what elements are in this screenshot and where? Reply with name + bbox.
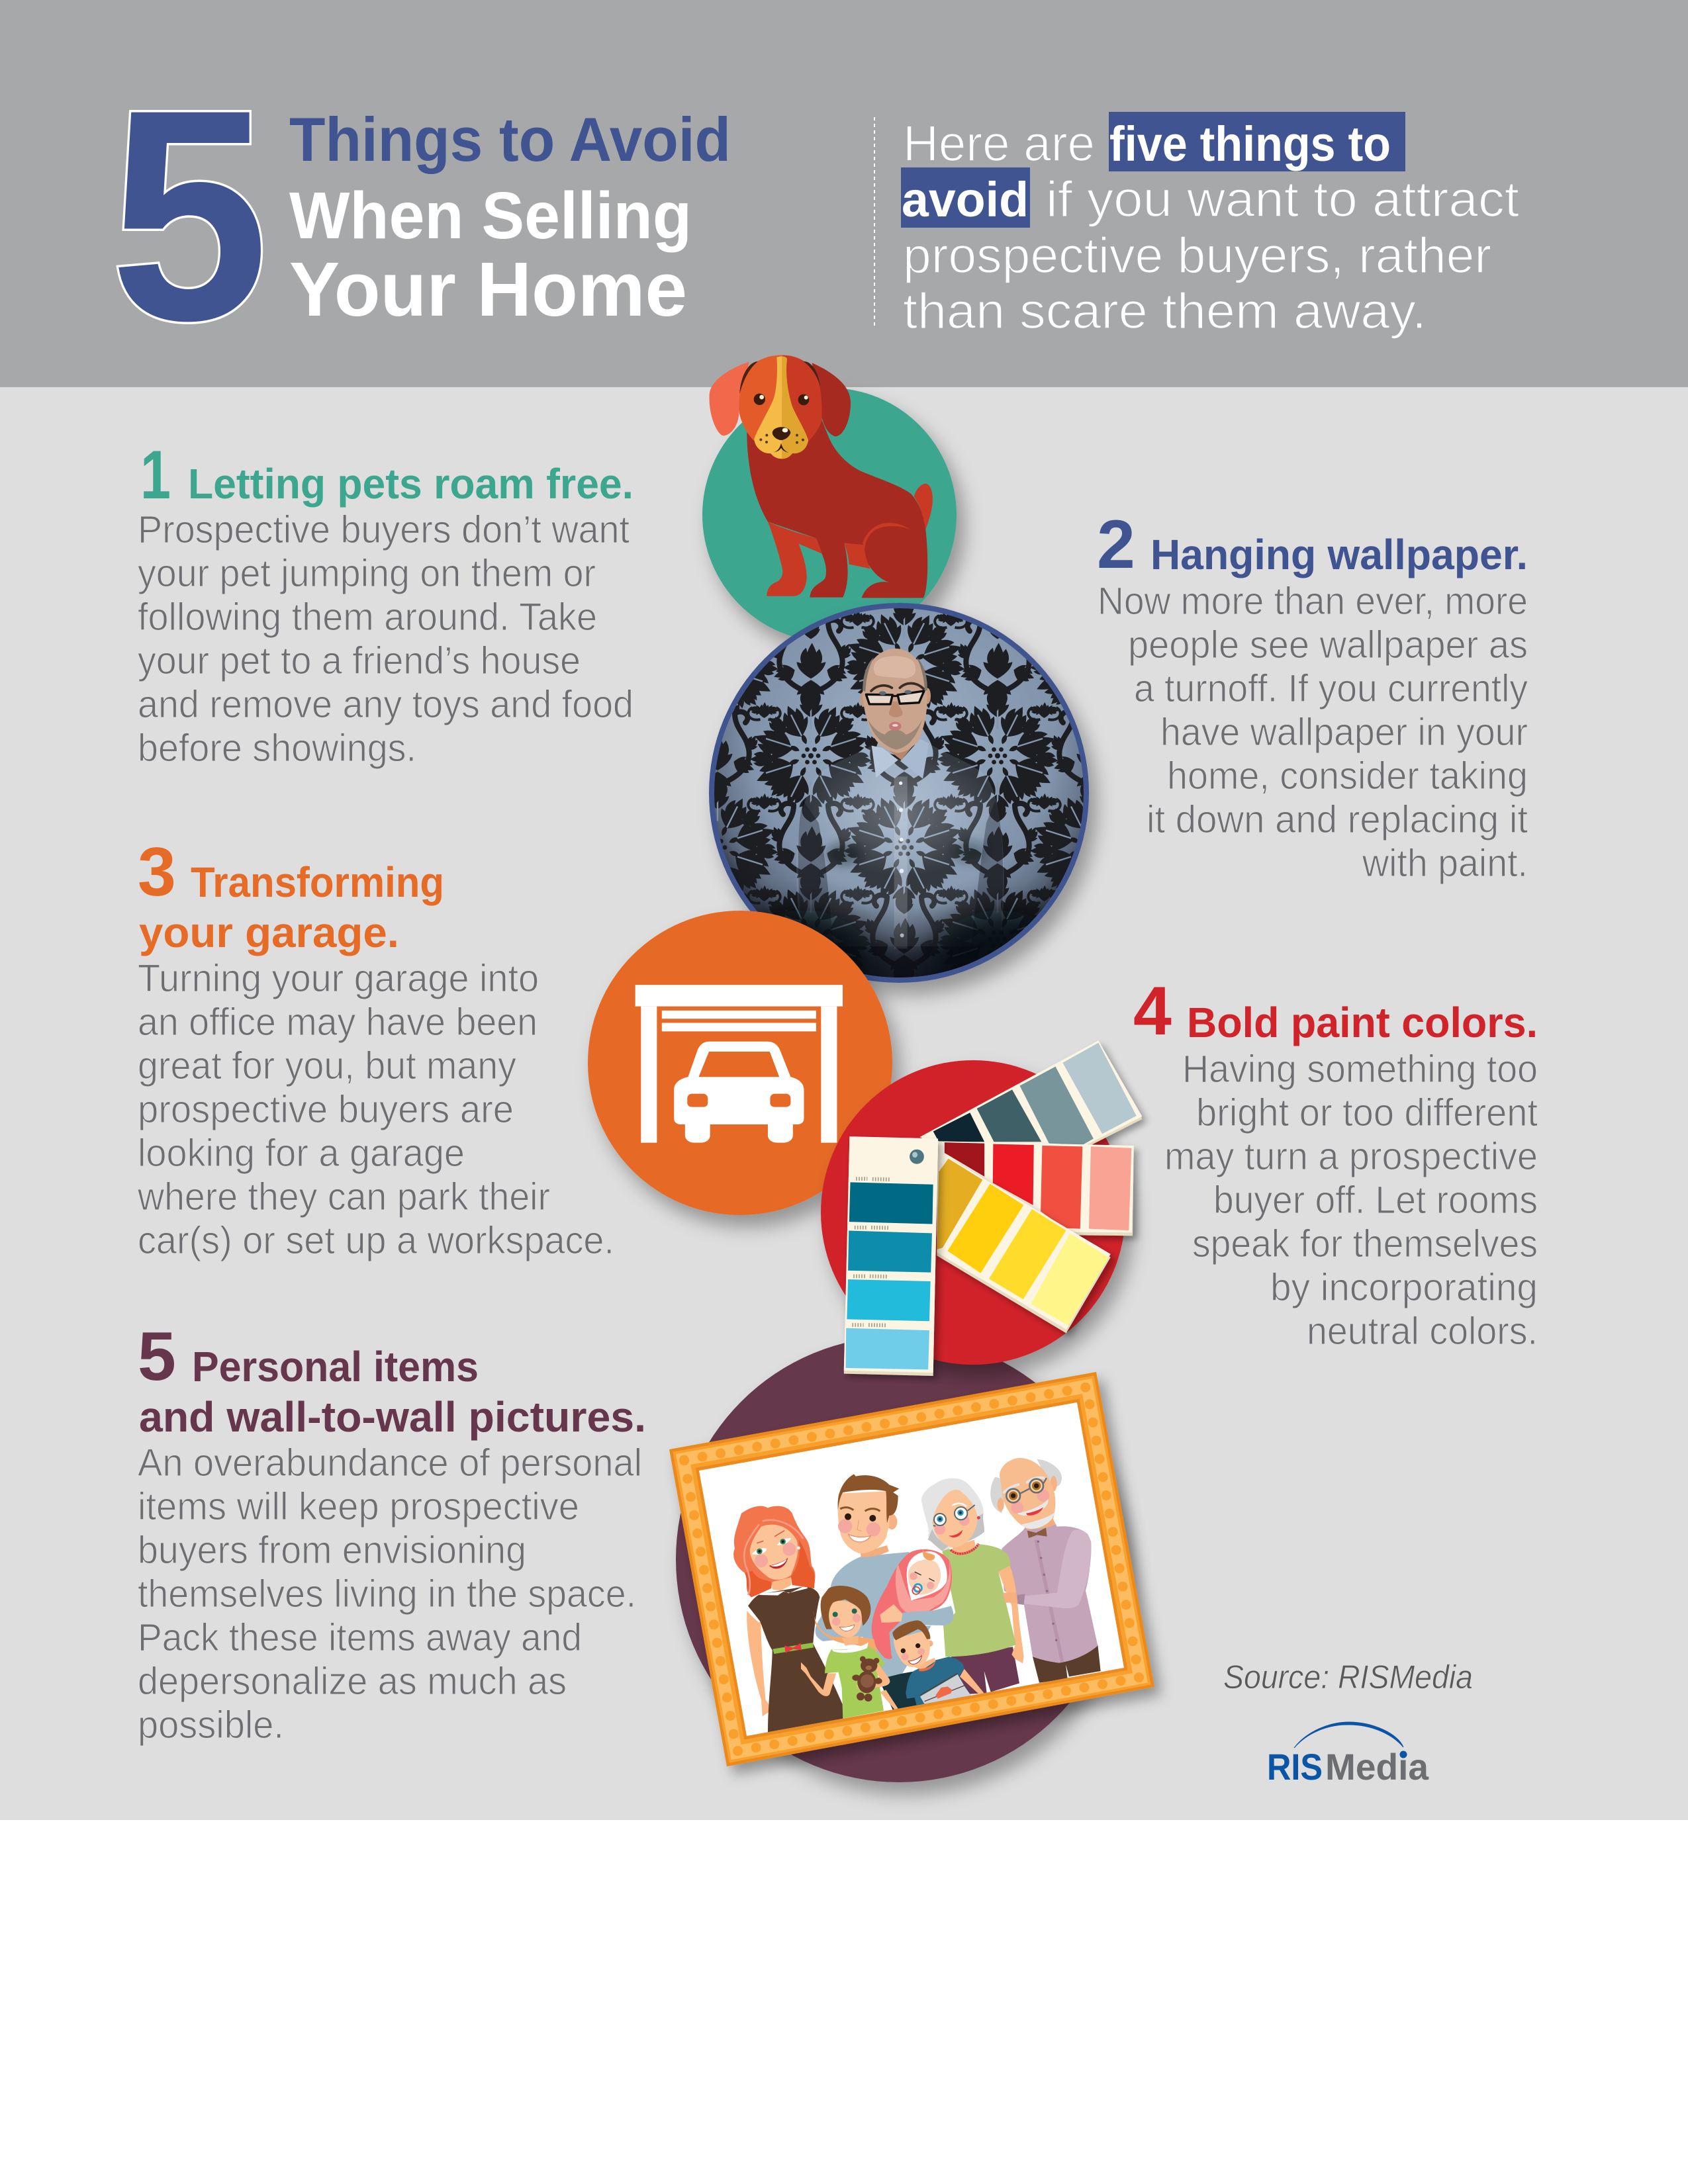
boy in teal shirt xyxy=(880,1620,984,1709)
item 3 text xyxy=(137,834,614,1262)
grandparents xyxy=(921,1458,1101,1694)
icon: paint colour fan deck xyxy=(844,1040,1142,1376)
item 5 text: buyers from envisioning xyxy=(138,1529,526,1572)
item 3 text: car(s) or set up a workspace. xyxy=(138,1219,614,1262)
item 2 text: Now more than ever, more xyxy=(1098,580,1528,623)
item 2 text: Hanging wallpaper. xyxy=(1150,531,1528,578)
item 3 text: an office may have been xyxy=(138,1001,538,1044)
intro text: than scare them away. xyxy=(903,283,1427,340)
item 2 text: it down and replacing it xyxy=(1147,798,1528,841)
item 5 text: possible. xyxy=(138,1704,284,1747)
blue swatch leaf xyxy=(844,1136,938,1376)
item 4 text: 4 xyxy=(1133,973,1172,1050)
large numeral 5: 5 xyxy=(110,47,269,383)
teal circle xyxy=(702,388,957,642)
picture frame xyxy=(669,1372,1154,1766)
item 2 text: with paint. xyxy=(1362,842,1528,885)
logo: RISMedia: RIS xyxy=(1267,1746,1323,1788)
icon: garage with car xyxy=(635,985,843,1143)
yellow swatch leaf xyxy=(937,1158,1111,1333)
item 4 text: bright or too different xyxy=(1196,1091,1538,1134)
intro text xyxy=(901,112,1519,340)
icon: framed family portrait xyxy=(669,1372,1154,1766)
title: Your Home xyxy=(289,246,687,332)
item 5 text: depersonalize as much as xyxy=(138,1660,567,1703)
title xyxy=(289,105,731,332)
intro text: Here are xyxy=(903,116,1095,172)
man's shirt xyxy=(796,743,1004,948)
item 2 text: people see wallpaper as xyxy=(1128,623,1528,666)
item 5 text xyxy=(138,1318,646,1747)
item 4 text: Bold paint colors. xyxy=(1187,999,1538,1046)
woman with red hair xyxy=(733,1506,843,1733)
man in blue shirt xyxy=(816,1474,931,1712)
item 2 text: have wallpaper in your xyxy=(1160,711,1528,754)
parents and children xyxy=(733,1474,984,1733)
item 3 text: prospective buyers are xyxy=(138,1088,514,1131)
item 4 text: by incorporating xyxy=(1270,1266,1538,1309)
logo: RISMedia xyxy=(1267,1722,1429,1788)
orange circle xyxy=(588,911,892,1215)
item 4 text: may turn a prospective xyxy=(1164,1135,1538,1178)
item 5 text: Personal items xyxy=(192,1343,479,1390)
grandmother xyxy=(921,1479,1024,1694)
item 4 text: Having something too xyxy=(1182,1048,1538,1091)
baby in pink blanket xyxy=(872,1549,953,1659)
item 3 text: Transforming xyxy=(191,858,444,906)
item 5 text: and wall-to-wall pictures. xyxy=(139,1393,646,1441)
item 1 text: your pet jumping on them or xyxy=(138,552,596,595)
item 4 text: neutral colors. xyxy=(1307,1310,1538,1353)
item 2 text xyxy=(1097,506,1528,885)
item 5 text: An overabundance of personal xyxy=(138,1441,642,1484)
item 5 text: 5 xyxy=(138,1318,176,1395)
red swatch leaf xyxy=(937,1141,1134,1236)
background panel xyxy=(0,384,1688,1820)
item 4 text xyxy=(1133,973,1538,1353)
item 4 text: buyer off. Let rooms xyxy=(1213,1179,1538,1222)
title: When Selling xyxy=(289,179,692,253)
intro text: avoid xyxy=(902,172,1029,227)
plum circle xyxy=(676,1336,1122,1782)
item 1 text: 1 xyxy=(140,437,171,514)
intro text: five things to xyxy=(1109,116,1391,171)
item 3 text: your garage. xyxy=(139,909,399,956)
item 3 text: 3 xyxy=(138,834,176,911)
item 1 text: and remove any toys and food xyxy=(138,683,633,726)
title: Things to Avoid xyxy=(289,105,731,174)
item 5 text: themselves living in the space. xyxy=(138,1572,636,1615)
item 3 text: great for you, but many xyxy=(138,1044,516,1087)
grandfather xyxy=(990,1458,1101,1683)
header band xyxy=(0,0,1688,387)
girl with teddy bear xyxy=(801,1586,890,1719)
item 1 text: your pet to a friend’s house xyxy=(138,639,581,682)
grey-blue swatch leaf xyxy=(920,1040,1142,1149)
icon: dog xyxy=(710,355,933,598)
man's head and collar xyxy=(860,649,931,779)
item 2 text: home, consider taking xyxy=(1167,754,1528,797)
intro text: if you want to attract xyxy=(1046,171,1519,228)
item 5 text: Pack these items away and xyxy=(138,1616,582,1659)
source credit: Source: RISMedia xyxy=(1223,1659,1473,1696)
item 5 text: items will keep prospective xyxy=(138,1485,579,1528)
item 1 text: Letting pets roam free. xyxy=(188,460,633,508)
item 1 text xyxy=(138,437,633,770)
grandfather's hand xyxy=(1003,1593,1017,1603)
item 2 text: a turnoff. If you currently xyxy=(1134,667,1528,710)
item 3 text: where they can park their xyxy=(137,1175,550,1218)
item 4 text: speak for themselves xyxy=(1192,1222,1538,1265)
item 1 text: before showings. xyxy=(138,727,416,770)
item 1 text: following them around. Take xyxy=(138,596,597,639)
red circle xyxy=(821,1060,1125,1365)
item 3 text: looking for a garage xyxy=(138,1132,465,1175)
photo: man against damask wallpaper xyxy=(702,596,1099,1036)
item 1 text: Prospective buyers don’t want xyxy=(138,508,630,551)
teddy bear xyxy=(852,1656,882,1702)
item 3 text: Turning your garage into xyxy=(138,957,539,1000)
item 2 text: 2 xyxy=(1097,506,1135,583)
intro text: prospective buyers, rather xyxy=(903,228,1491,284)
logo: RISMedia: Media xyxy=(1325,1746,1429,1788)
